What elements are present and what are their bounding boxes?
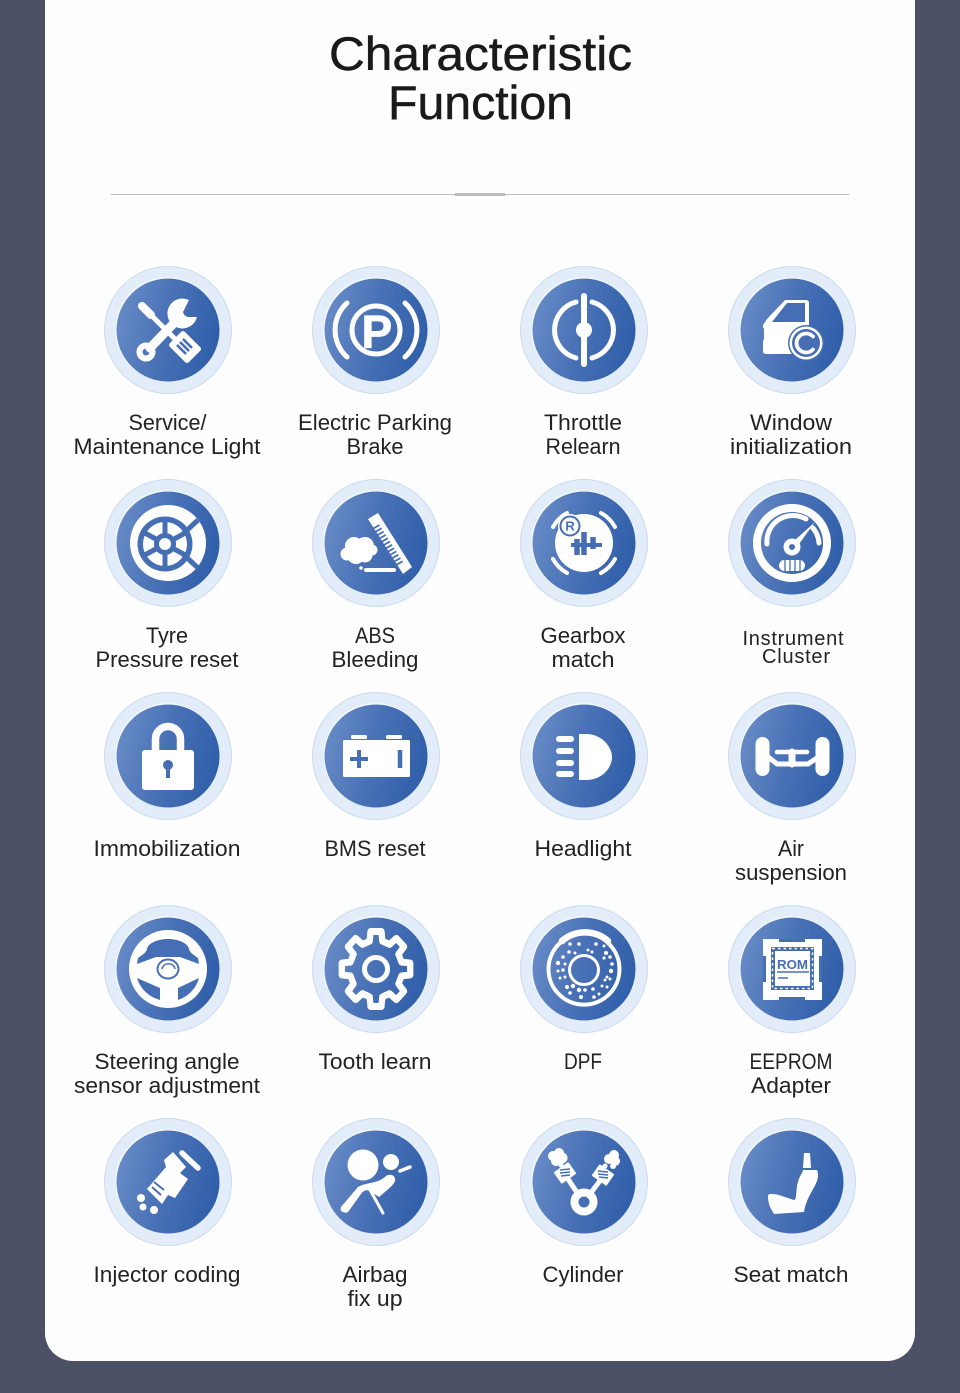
- label: [74, 1049, 260, 1098]
- icon: ROM chip: [728, 906, 856, 1032]
- icon: gear shift: R: [565, 518, 575, 534]
- icon: brake pedal and cloud: [312, 480, 440, 606]
- panel: Window initialization: [728, 266, 856, 459]
- icon: parking brake: P: [362, 306, 392, 358]
- label: Adapter: [751, 1073, 831, 1098]
- icon: injector: [104, 1118, 232, 1246]
- label: Airbag: [342, 1262, 408, 1287]
- icon: parking brake: [312, 266, 440, 394]
- label: Bleeding: [332, 647, 418, 672]
- label: initialization: [730, 434, 852, 459]
- icon: axle: [728, 692, 856, 820]
- label: [74, 410, 260, 459]
- icon: battery: [312, 692, 440, 820]
- label: ABS: [355, 623, 395, 648]
- icon: seat: [728, 1118, 856, 1246]
- icon: gear shift: [520, 480, 648, 606]
- label: Service/: [128, 410, 207, 435]
- label: Headlight: [534, 836, 632, 861]
- panel: Injector coding: [94, 1118, 240, 1287]
- panel: Air suspension: [728, 692, 856, 885]
- panel: Instrument Cluster: [728, 480, 856, 668]
- panel: Seat match: [728, 1118, 856, 1287]
- label: BMS reset: [324, 836, 426, 861]
- label: Gearbox: [540, 623, 626, 648]
- icon: V engine cylinders: [520, 1118, 648, 1246]
- panel: DPF: [520, 906, 648, 1074]
- icon: tyre: [104, 480, 232, 606]
- icon: padlock: [104, 692, 232, 820]
- label: [742, 628, 844, 668]
- label: [298, 410, 452, 459]
- panel: Tyre Pressure reset: [96, 480, 238, 672]
- panel: Airbag fix up: [312, 1118, 440, 1311]
- label: [332, 623, 418, 672]
- label: Tooth learn: [318, 1049, 432, 1074]
- panel: BMS reset: [312, 692, 440, 861]
- title: Characteristic: [329, 27, 632, 80]
- label: DPF: [564, 1049, 602, 1074]
- title: Function: [388, 76, 573, 129]
- icon: particulate filter: [520, 906, 648, 1032]
- icon: ROM chip: ROM: [777, 957, 808, 972]
- label: Pressure reset: [96, 647, 238, 672]
- panel: Tooth learn: [312, 906, 440, 1074]
- label: Maintenance Light: [74, 434, 260, 459]
- label: match: [552, 647, 614, 672]
- icon: throttle: [520, 266, 648, 394]
- label: [96, 623, 238, 672]
- label: Immobilization: [94, 836, 240, 861]
- label: [342, 1262, 408, 1311]
- panel: Steering angle sensor adjustment: [74, 906, 260, 1098]
- label: [730, 410, 852, 459]
- icon: car door: [728, 266, 856, 394]
- panel: EEPROM Adapter: [728, 906, 856, 1098]
- label: Window: [750, 410, 832, 435]
- icon: wrench and screwdriver: [104, 266, 232, 394]
- panel: Throttle Relearn: [520, 266, 648, 459]
- panel: Immobilization: [94, 692, 240, 861]
- label: sensor adjustment: [74, 1073, 260, 1098]
- icon: steering wheel: [104, 906, 232, 1032]
- label: Instrument: [742, 628, 844, 650]
- icon: gear: [312, 906, 440, 1032]
- label: Steering angle: [94, 1049, 240, 1074]
- label: Brake: [346, 434, 404, 459]
- icon: gauge: [728, 480, 856, 606]
- panel: Cylinder: [520, 1118, 648, 1287]
- icon: airbag: [312, 1118, 440, 1246]
- label: Seat match: [734, 1262, 848, 1287]
- label: Air: [778, 836, 804, 861]
- label: [750, 1049, 832, 1098]
- label: [544, 410, 622, 459]
- panel: ABS Bleeding: [312, 480, 440, 672]
- panel: Electric Parking Brake: [298, 266, 452, 459]
- label: Tyre: [146, 623, 188, 648]
- title: [329, 27, 632, 129]
- icon: headlight: [520, 692, 648, 820]
- label: Injector coding: [94, 1262, 240, 1287]
- label: Cluster: [762, 646, 830, 668]
- label: Electric Parking: [298, 410, 452, 435]
- panel: Headlight: [520, 692, 648, 861]
- divider: [111, 193, 849, 196]
- label: [540, 623, 626, 672]
- label: EEPROM: [750, 1049, 832, 1074]
- label: Throttle: [544, 410, 622, 435]
- label: [735, 836, 847, 885]
- label: fix up: [348, 1286, 402, 1311]
- panel: Service/Maintenance Light: [74, 266, 260, 459]
- label: Relearn: [546, 434, 620, 459]
- panel: Gearbox match: [520, 480, 648, 672]
- label: suspension: [735, 860, 847, 885]
- label: Cylinder: [542, 1262, 624, 1287]
